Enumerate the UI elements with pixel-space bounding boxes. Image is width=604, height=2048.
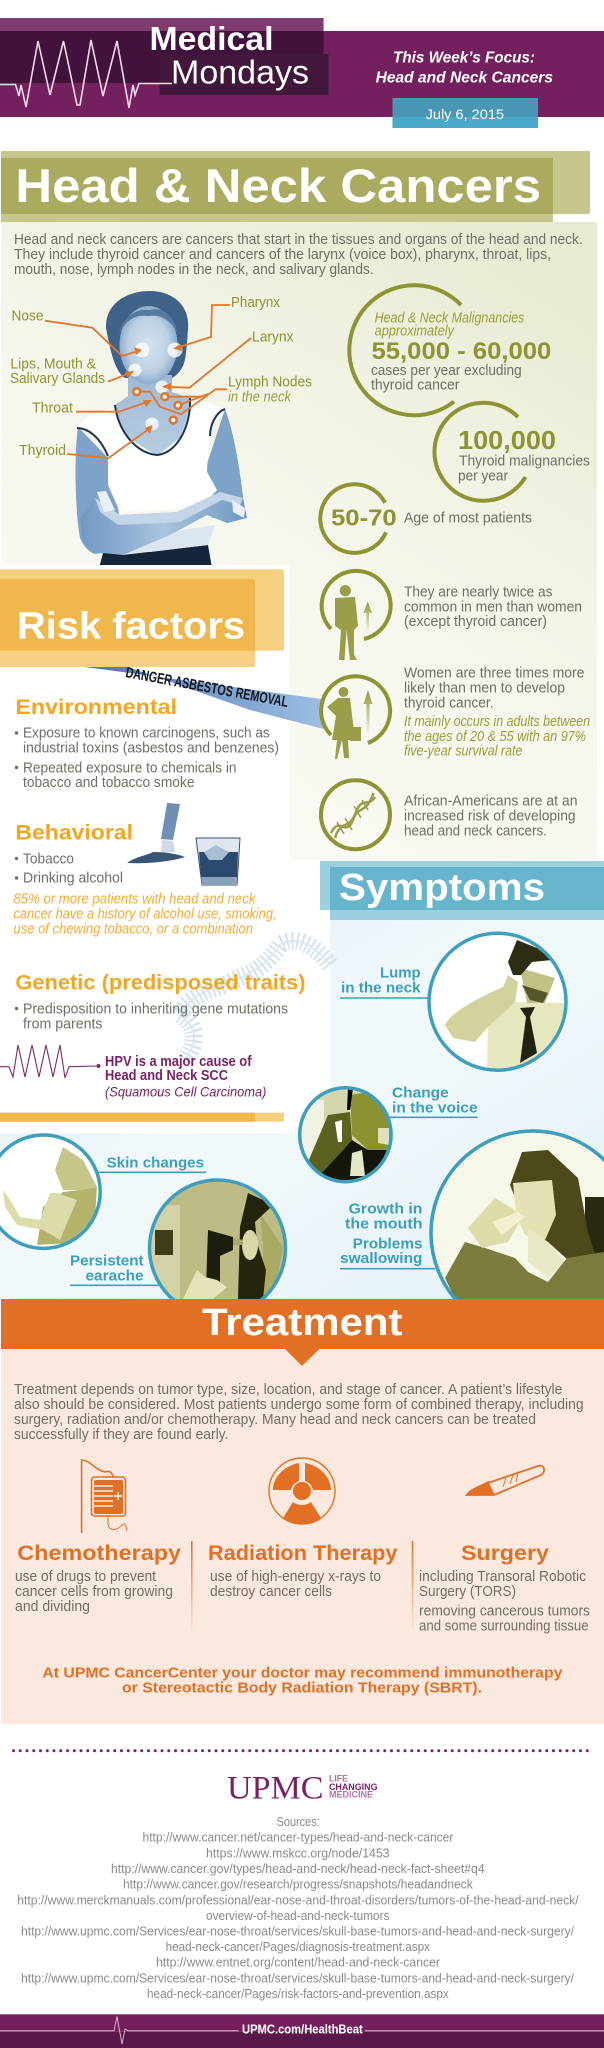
callouts: anatomy labels: Nose [12, 309, 44, 325]
heading: Treatment [1, 1299, 604, 1366]
icon: woman silhouette [327, 687, 361, 759]
sources list: http://www.entnet.org/content/head-and-neck-cancer [156, 1956, 440, 1970]
callouts: anatomy labels: in the neck [228, 390, 292, 406]
stat: 55,000-60,000: 55,000 - 60,000 [372, 338, 551, 365]
column: Surgery: including Transoral Robotic [419, 1569, 586, 1585]
column: Chemotherapy: use of drugs to prevent [15, 1569, 156, 1585]
stat: 55,000-60,000: thyroid cancer [371, 378, 460, 394]
column: Surgery: removing cancerous tumors [419, 1604, 590, 1620]
icon: man silhouette [335, 585, 358, 660]
section: Behavioral: cancer have a history of alcohol use, smoking, [14, 906, 277, 922]
section: Behavioral: Drinking alcohol [23, 871, 123, 887]
column: Chemotherapy [15, 1542, 181, 1615]
callout: HPV [0, 1045, 266, 1100]
icon: radiation [269, 1458, 335, 1524]
symptom: growth in the mouth, problems swallowing [340, 1129, 604, 1299]
heading: Risk factors [0, 569, 284, 667]
treatment intro text: also should be considered. Most patients undergo some form of combined therapy, including [14, 1397, 584, 1413]
section: Environmental: Exposure to known carcinogens, such as [23, 726, 270, 742]
section: Genetic: Genetic (predisposed traits) [15, 971, 306, 994]
symptom: change in the voice: in the voice [392, 1099, 478, 1116]
column: Chemotherapy: Chemotherapy [17, 1542, 181, 1565]
stat: 55,000-60,000: cases per year excluding [371, 363, 522, 379]
treatment intro text: successfully if they are found early. [14, 1427, 228, 1443]
icon: IV bag [82, 1460, 127, 1533]
icon: dna [331, 793, 375, 838]
stat: women: thyroid cancer. [404, 695, 494, 711]
sources list: head-neck-cancer/Pages/risk-factors-and-prevention.aspx [147, 1987, 449, 2001]
section: Genetic: from parents [23, 1016, 102, 1032]
section: Behavioral: 85% or more patients with head and neck [14, 891, 256, 907]
heading: Treatment: Treatment [202, 1302, 403, 1344]
callouts: anatomy labels: Salivary Glands [10, 371, 105, 387]
symptom: growth in the mouth, problems swallowing: swallowing [340, 1250, 422, 1267]
sources list: http://www.upmc.com/Services/ear-nose-throat/services/skull-base-tumors-and-head-and-neck-surgery/ [21, 1924, 574, 1938]
section: Behavioral: Behavioral [15, 821, 133, 844]
column divider [191, 1541, 193, 1633]
title: Medical Mondays: Medical [150, 20, 274, 57]
stat: men: (except thyroid cancer) [404, 614, 547, 630]
stat: 100,000: per year [458, 469, 508, 485]
footer band: UPMC.com/HealthBeat [242, 2021, 363, 2036]
sources list: http://www.cancer.net/cancer-types/head-and-neck-cancer [142, 1831, 453, 1845]
main title banner [1, 151, 590, 222]
symptom: lump in the neck: Lump [380, 964, 421, 981]
stat: age 50-70 [320, 484, 532, 553]
header band [0, 18, 604, 128]
sources list: https://www.mskcc.org/node/1453 [206, 1846, 390, 1860]
stat: 100,000 [434, 403, 590, 501]
pipe: asbestos danger [85, 664, 324, 729]
symptom: persistent earache [70, 1178, 288, 1299]
column: Surgery: Surgery [461, 1542, 549, 1565]
intro text: mouth, nose, lymph nodes in the neck, and salivary glands. [14, 262, 374, 278]
stat: African-Americans: African-Americans are at an [404, 794, 578, 810]
stat: African-Americans [321, 780, 578, 849]
section: Behavioral: Tobacco [23, 851, 74, 867]
intro text: They include thyroid cancer and cancers of the larynx (voice box), pharynx, throat, lips, [14, 247, 551, 263]
symptom: skin changes: Skin changes [107, 1155, 204, 1172]
logo: UPMC: MEDICINE [329, 1790, 373, 1800]
stat: women [321, 665, 590, 760]
section: Environmental [15, 696, 279, 791]
callouts: anatomy labels: Lymph Nodes [228, 375, 312, 391]
column divider [412, 1541, 413, 1633]
stat: women: Women are three times more [404, 665, 584, 681]
callouts: anatomy labels [10, 295, 312, 459]
callout: HPV: HPV is a major cause of [105, 1054, 252, 1070]
panel: risk factors column [0, 565, 330, 1132]
heading: Risk factors: Risk factors [17, 605, 245, 647]
heading: Symptoms: Symptoms [339, 867, 545, 909]
callout: HPV: Head and Neck SCC [105, 1068, 228, 1084]
icon: cigarette [127, 803, 185, 863]
callout: HPV: (Squamous Cell Carcinoma) [105, 1084, 266, 1100]
section: Environmental: Repeated exposure to chemicals in [23, 760, 236, 776]
icon: up arrow small [363, 602, 372, 632]
callouts: anatomy labels: Thyroid [19, 443, 66, 459]
focus text [376, 50, 553, 86]
sources list: http://www.merckmanuals.com/professional/ear-nose-and-throat-disorders/tumors-of-the-head-and-neck/ [17, 1893, 579, 1907]
column: Surgery [419, 1542, 590, 1634]
main title banner: Head & Neck Cancers [15, 159, 541, 212]
stat: 100,000: 100,000 [458, 425, 556, 455]
callouts: anatomy labels: Throat [32, 401, 73, 417]
logo: UPMC: CHANGING [329, 1782, 378, 1792]
logo: UPMC [227, 1770, 378, 1806]
sources list: http://www.cancer.gov/types/head-and-neck/head-neck-fact-sheet#q4 [111, 1862, 485, 1876]
logo: UPMC: UPMC [227, 1770, 324, 1806]
title: Medical Mondays [150, 20, 309, 90]
intro text [14, 232, 583, 278]
section: Behavioral: use of chewing tobacco, or a combination [14, 921, 253, 937]
column: Radiation Therapy: use of high-energy x-rays to [210, 1569, 381, 1585]
icon: whiskey glass [196, 838, 240, 885]
column: Surgery: Surgery (TORS) [419, 1584, 516, 1600]
focus text: This Week’s Focus: [393, 50, 535, 67]
sources list [17, 1815, 579, 2001]
symptom: change in the voice: Change [392, 1084, 449, 1101]
section: Environmental: tobacco and tobacco smoke [23, 775, 194, 791]
symptom: growth in the mouth, problems swallowing: the mouth [345, 1215, 422, 1232]
stat: men [322, 571, 582, 660]
panel: overview background [1, 222, 597, 860]
column: Radiation Therapy: Radiation Therapy [208, 1542, 398, 1565]
sources list: head-neck-cancer/Pages/diagnosis-treatment.aspx [166, 1940, 431, 1954]
stat: 100,000: Thyroid malignancies [459, 454, 590, 470]
column: Chemotherapy: cancer cells from growing [15, 1584, 173, 1600]
symptom: lump in the neck: in the neck [341, 979, 421, 996]
sources list: http://www.cancer.gov/research/progress/snapshots/headandneck [123, 1878, 473, 1892]
panel: treatment background [1, 1349, 604, 1724]
focus text: Head and Neck Cancers [376, 69, 553, 86]
stat: age 50-70: Age of most patients [404, 510, 532, 526]
callout: UPMC CancerCenter [42, 1665, 563, 1697]
symptom: skin changes [0, 1135, 206, 1249]
intro text: Head and neck cancers are cancers that start in the tissues and organs of the head and neck. [14, 232, 583, 248]
stat: 55,000-60,000: approximately [375, 324, 455, 340]
callout: UPMC CancerCenter: or Stereotactic Body Radiation Therapy (SBRT). [122, 1680, 482, 1697]
column: Surgery: and some surrounding tissue [419, 1618, 589, 1634]
date badge [392, 98, 538, 128]
icon: up arrow large [364, 690, 372, 735]
sources list: Sources: [277, 1815, 320, 1829]
symptom: persistent earache: earache [86, 1268, 144, 1285]
symptom: persistent earache: Persistent [70, 1253, 144, 1270]
section: Environmental: Environmental [15, 696, 177, 719]
callouts: anatomy labels: Lips, Mouth & [10, 356, 96, 372]
title: Medical Mondays: Mondays [171, 53, 309, 90]
stat: women: likely than men to develop [404, 680, 565, 696]
symptom: lump in the neck [340, 933, 570, 1075]
sources list: overview-of-head-and-neck-tumors [206, 1909, 390, 1923]
risk factors bottom bar [0, 1113, 284, 1122]
stat: women: five-year survival rate [404, 744, 522, 760]
section: Environmental: industrial toxins (asbestos and benzenes) [23, 740, 279, 756]
stat: 55,000-60,000 [349, 285, 551, 415]
icon: heartbeat line [0, 40, 172, 108]
pipe: asbestos danger: DANGER ASBESTOS REMOVAL [124, 664, 290, 711]
illustration: pale dna strand [180, 941, 330, 1060]
stat: age 50-70: 50-70 [331, 505, 397, 531]
stat: African-Americans: increased risk of developing [404, 809, 576, 825]
date badge: July 6, 2015 [426, 106, 504, 122]
callouts: anatomy labels: Larynx [252, 330, 294, 346]
symptom: change in the voice [299, 1084, 478, 1185]
section: Genetic [15, 971, 306, 1032]
callout: UPMC CancerCenter: At UPMC CancerCenter your doctor may recommend immunotherapy [42, 1665, 563, 1682]
stat: men: They are nearly twice as [404, 585, 552, 601]
column: Chemotherapy: and dividing [15, 1599, 90, 1615]
logo: UPMC: LIFE [329, 1774, 348, 1784]
treatment intro text: surgery, radiation and/or chemotherapy. Many head and neck cancers can be treated [14, 1412, 536, 1428]
symptom: growth in the mouth, problems swallowing: Problems [353, 1235, 422, 1252]
treatment intro text: Treatment depends on tumor type, size, location, and stage of cancer. A patient’s lifestyle [14, 1382, 562, 1398]
stat: 55,000-60,000: Head & Neck Malignancies [375, 311, 524, 327]
treatment intro text [14, 1382, 584, 1443]
heading: Symptoms [320, 861, 604, 920]
footer band [0, 2014, 604, 2048]
section: Behavioral [14, 821, 277, 937]
sources list: http://www.upmc.com/Services/ear-nose-throat/services/skull-base-tumors-and-head-and-neck-surgery/ [21, 1971, 574, 1985]
callouts: anatomy labels: Pharynx [231, 295, 281, 311]
column: Radiation Therapy [208, 1542, 398, 1600]
panel: symptoms background [0, 920, 604, 1299]
icon: scalpel [467, 1466, 544, 1495]
column: Radiation Therapy: destroy cancer cells [210, 1584, 332, 1600]
stat: men: common in men than women [404, 600, 582, 616]
stat: African-Americans: head and neck cancers. [404, 823, 547, 839]
symptom: growth in the mouth, problems swallowing: Growth in [349, 1201, 422, 1218]
photo: woman with crossed arms [76, 291, 247, 568]
section: Genetic: Predisposition to inheriting gene mutations [23, 1001, 288, 1017]
